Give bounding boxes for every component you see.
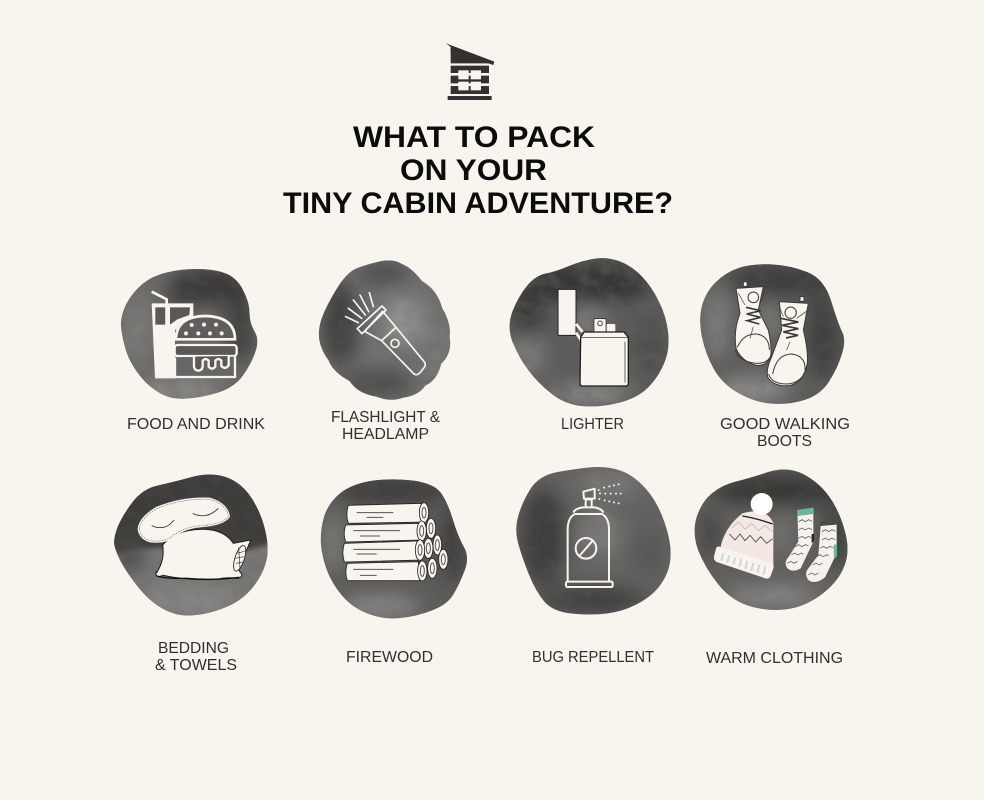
label: flashlight and headlamp: HEADLAMP — [342, 426, 429, 443]
icon: flashlight — [346, 293, 425, 375]
watercolor blob: bug repellent — [513, 465, 673, 617]
watercolor blob: boots — [700, 264, 844, 404]
icon: cabin — [446, 43, 494, 100]
label: firewood: FIREWOOD — [346, 649, 433, 666]
label: good walking boots: BOOTS — [757, 433, 812, 450]
icon: pillow and sleep mask — [138, 497, 251, 580]
label: lighter: LIGHTER — [561, 416, 624, 433]
title: TINY CABIN ADVENTURE? — [283, 187, 673, 220]
label: flashlight and headlamp: FLASHLIGHT & — [331, 409, 440, 426]
title — [283, 121, 673, 220]
watercolor blob: food — [120, 269, 258, 399]
icon: spray can — [566, 483, 622, 587]
panel: flashlight and headlamp — [318, 260, 450, 439]
label: warm clothing: WARM CLOTHING — [706, 650, 843, 667]
label: bedding and towels: & TOWELS — [155, 657, 237, 674]
label: good walking boots — [720, 416, 850, 450]
label: bedding and towels: BEDDING — [158, 640, 229, 657]
panel: lighter — [503, 255, 673, 433]
panel: firewood — [320, 479, 467, 662]
icon: hat and socks — [714, 493, 837, 582]
label: bedding and towels — [155, 640, 237, 674]
panel: good walking boots — [697, 260, 850, 450]
label: good walking boots: GOOD WALKING — [720, 416, 850, 433]
label: flashlight and headlamp — [331, 409, 440, 443]
icon: burger and drink — [152, 292, 237, 378]
panel: bedding and towels — [114, 474, 268, 670]
watercolor blob: warm clothing — [694, 470, 848, 610]
watercolor blob: flashlight — [318, 260, 450, 400]
icon: lighter — [558, 289, 628, 386]
icon: boots — [735, 281, 809, 386]
icon: firewood logs — [343, 503, 448, 581]
panel: bug repellent — [513, 465, 673, 666]
title: WHAT TO PACK — [353, 121, 595, 154]
label: food and drink: FOOD AND DRINK — [127, 416, 265, 433]
title: ON YOUR — [400, 154, 547, 187]
watercolor blob: bedding — [114, 474, 268, 616]
watercolor blob: firewood — [320, 479, 467, 618]
label: bug repellent: BUG REPELLENT — [532, 649, 654, 666]
panel: food and drink — [120, 269, 265, 429]
panel: warm clothing — [694, 470, 848, 663]
watercolor blob: lighter — [503, 255, 673, 408]
